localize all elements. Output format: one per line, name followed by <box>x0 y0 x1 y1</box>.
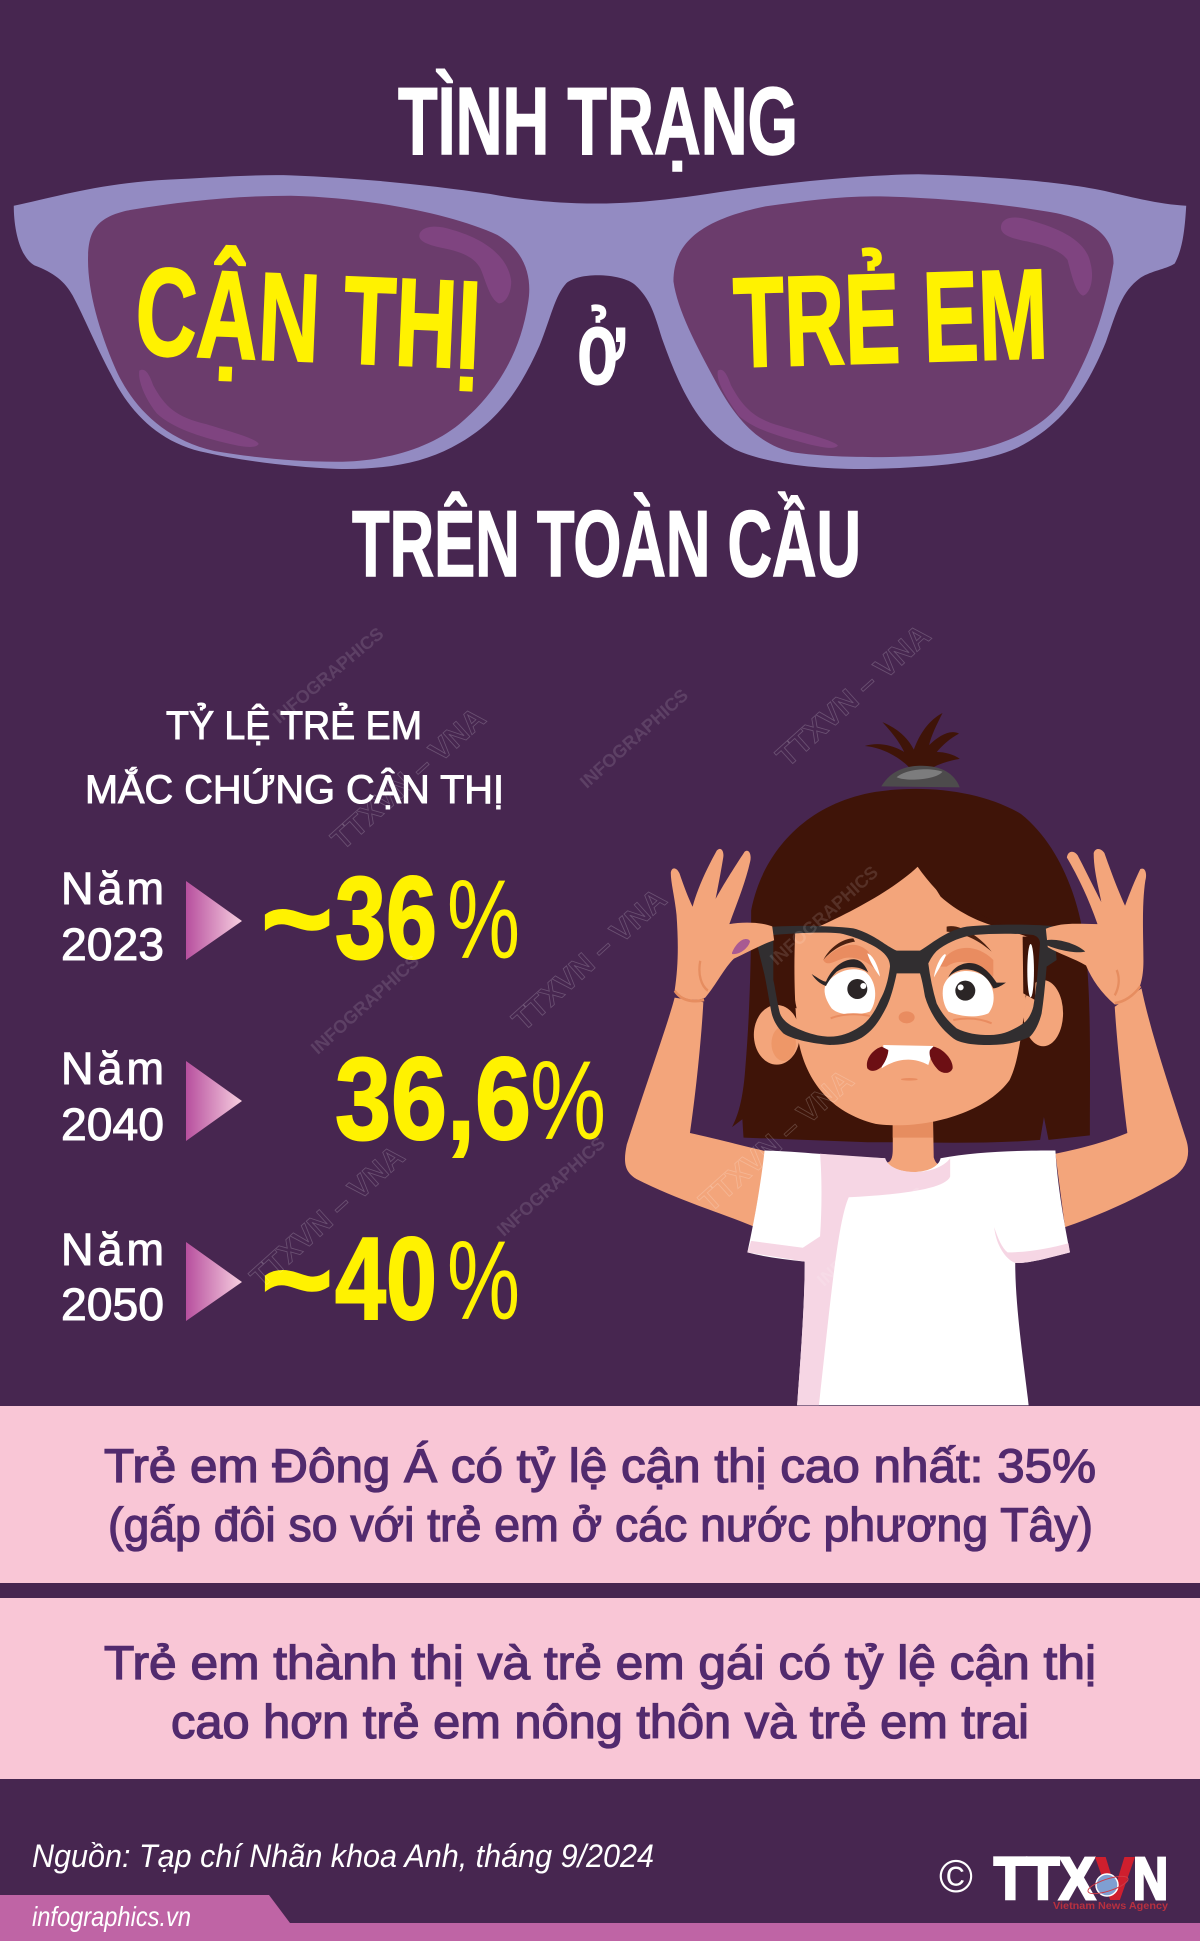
title: first line: TÌNH TRẠNG <box>398 68 798 175</box>
stat row: 2050: Năm <box>61 1224 164 1275</box>
watermarks: INFOGRAPHICS <box>766 862 882 969</box>
stat row: 2023 <box>61 852 520 983</box>
stat row: 2050: 2050 <box>61 1279 164 1330</box>
logo: TTXVN: Vietnam News Agency <box>1053 1901 1168 1912</box>
stat row: 2023: % <box>447 857 520 982</box>
logo: TTXVN: V <box>1096 1846 1134 1912</box>
stat row: 2050 <box>61 1213 520 1344</box>
stat row: 2040 <box>61 1033 606 1164</box>
logo: TTXVN: N <box>1133 1846 1168 1912</box>
watermarks: INFOGRAPHICS <box>307 951 423 1058</box>
watermarks: TTXVN – VNA <box>693 1063 860 1218</box>
heading: chart title <box>85 702 504 812</box>
footer band with website <box>0 1895 1200 1941</box>
stat row: 2040: Năm <box>61 1043 164 1094</box>
watermarks: TTXVN – VNA <box>506 882 673 1037</box>
stat row: 2050: 40 <box>335 1213 437 1344</box>
title: last line: TRÊN TOÀN CẦU <box>352 491 861 596</box>
stat row: 2050: ~ <box>262 1216 332 1344</box>
logo: TTXVN: © <box>939 1850 973 1902</box>
stat row: 2023: ~ <box>262 855 332 983</box>
panel: urban and girls note <box>0 1598 1200 1779</box>
watermarks: INFOGRAPHICS <box>576 685 692 792</box>
watermarks: TTXVN – VNA <box>325 701 492 856</box>
panel: East Asia note: Trẻ em Đông Á có tỷ lệ cận thị cao nhất: 35% <box>104 1439 1096 1492</box>
panel: urban and girls note: Trẻ em thành thị và trẻ em gái có tỷ lệ cận thị <box>104 1636 1096 1689</box>
footer band with website: infographics.vn <box>32 1901 191 1932</box>
watermarks: INFOGRAPHICS <box>813 1183 929 1290</box>
stat row: 2040: 36,6 <box>335 1033 531 1164</box>
illustration: girl adjusting glasses <box>625 713 1188 1405</box>
stat row: 2023: 2023 <box>61 919 164 970</box>
title: highlighted words left lens: CẬN THỊ <box>133 242 483 395</box>
stat row: 2040: % <box>530 1038 606 1163</box>
heading: chart title: MẮC CHỨNG CẬN THỊ <box>85 766 504 812</box>
watermarks: INFOGRAPHICS <box>493 1133 609 1240</box>
illustration: glasses <box>14 174 1186 469</box>
panel: urban and girls note: cao hơn trẻ em nông thôn và trẻ em trai <box>171 1695 1029 1748</box>
stat row: 2040: 2040 <box>61 1099 164 1150</box>
stat row: 2023: Năm <box>61 863 164 914</box>
logo: TTXVN <box>939 1846 1168 1912</box>
stat row: 2023: 36 <box>335 852 437 983</box>
watermarks: TTXVN – VNA <box>244 1139 411 1294</box>
watermarks: TTXVN – VNA <box>770 618 937 773</box>
watermarks <box>244 618 937 1294</box>
stat row: 2050: % <box>447 1218 520 1343</box>
title: connecting word: ở <box>577 289 625 407</box>
watermarks: INFOGRAPHICS <box>269 623 387 727</box>
panel: East Asia note: (gấp đôi so với trẻ em ở các nước phương Tây) <box>108 1498 1093 1551</box>
heading: chart title: TỶ LỆ TRẺ EM <box>166 702 422 748</box>
panel: East Asia note <box>0 1406 1200 1583</box>
logo: TTXVN: TTX <box>994 1846 1095 1912</box>
source line: Nguồn: Tạp chí Nhãn khoa Anh, tháng 9/2024 <box>32 1838 654 1874</box>
